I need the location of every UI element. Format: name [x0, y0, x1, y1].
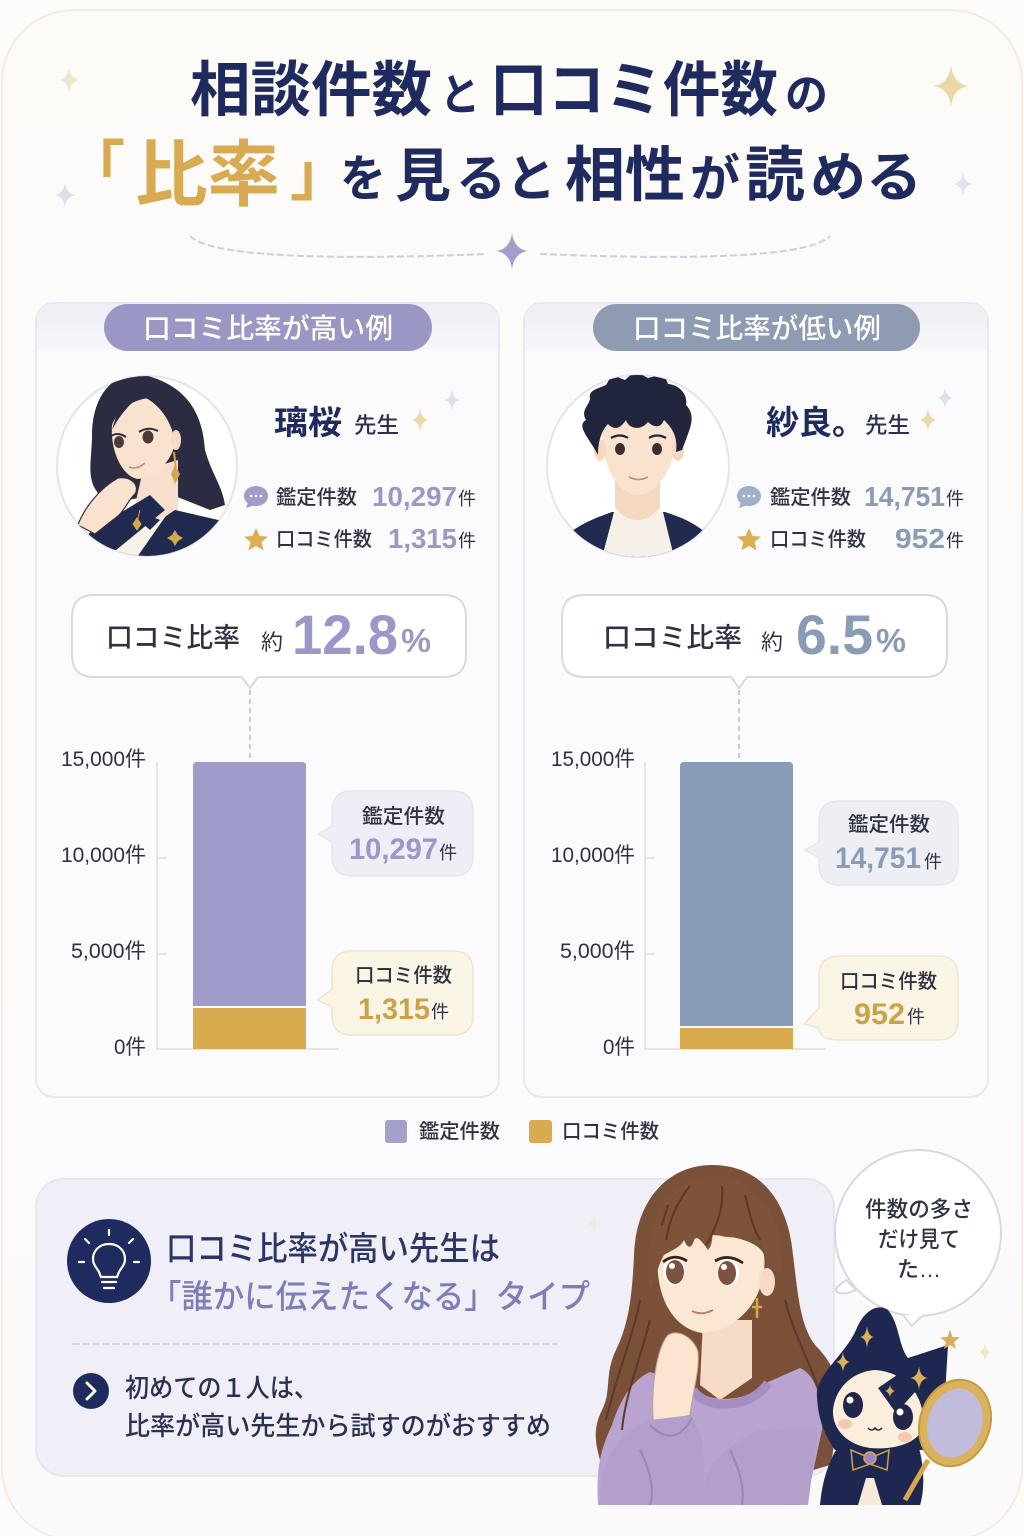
title [65, 57, 922, 216]
icon: chat bubble [244, 486, 268, 508]
callout: review value: 件 [431, 1002, 449, 1022]
panel: low ratio example [524, 303, 988, 1097]
stat: consultation count [737, 481, 964, 512]
title: める [810, 148, 922, 208]
title: 「 [65, 136, 125, 203]
title: を [340, 151, 386, 207]
teacher name: 先生 [354, 413, 399, 438]
teacher name: 璃桜 [274, 404, 342, 441]
legend [385, 1120, 659, 1143]
icon: chat bubble [737, 486, 761, 508]
stat: consultation count: 鑑定件数 [770, 486, 851, 509]
callout: review value: 952 [854, 998, 905, 1031]
callout: ratio 6.5%: 約 [761, 630, 783, 655]
panel heading pill [593, 304, 920, 351]
speech bubble [835, 1150, 1001, 1326]
bar: consultation segment [680, 762, 793, 1026]
speech bubble: だけ見て [878, 1227, 960, 1252]
bar: review segment [680, 1028, 793, 1049]
legend: 鑑定件数 [419, 1120, 500, 1143]
panel heading pill [104, 304, 432, 351]
teacher name [274, 389, 460, 441]
callout: ratio 6.5%: 口コミ比率 [603, 623, 742, 653]
callout: review value [804, 956, 958, 1040]
callout: consultation value: 14,751 [835, 842, 921, 875]
stat: review count: 口コミ件数 [770, 528, 866, 551]
title: 」 [290, 141, 350, 208]
title: 相談件数 [190, 57, 432, 124]
bar chart: high ratio: 0件 [114, 1036, 146, 1059]
callout: consultation value: 鑑定件数 [848, 813, 930, 836]
callout: ratio 12.8%: 12.8 [292, 603, 398, 666]
panel: high ratio example [36, 303, 499, 1097]
stat: consultation count: 14,751 [864, 481, 945, 512]
callout: ratio 12.8%: 口コミ比率 [106, 623, 240, 653]
illustration: woman with long brown hair [596, 1165, 836, 1505]
bar chart: low ratio: 5,000件 [560, 940, 635, 963]
title: 見 [395, 144, 451, 209]
teacher name: 紗良 [766, 404, 832, 441]
callout: ratio 12.8% [72, 595, 466, 688]
bar chart: low ratio: 15,000件 [551, 748, 635, 771]
teacher name [766, 387, 953, 441]
bar chart: low ratio: 10,000件 [551, 844, 635, 867]
bar chart: low ratio [551, 690, 958, 1059]
stat: review count: 1,315 [388, 523, 457, 554]
callout: review value: 件 [907, 1007, 925, 1027]
stat: consultation count: 鑑定件数 [276, 486, 357, 509]
bar chart: high ratio [61, 690, 473, 1059]
callout: review value [317, 951, 473, 1035]
callout: ratio 12.8%: 約 [261, 630, 283, 655]
speech bubble: 件数の多さ [865, 1197, 973, 1222]
callout: review value: 口コミ件数 [840, 970, 937, 993]
title: 比率 [135, 136, 280, 216]
callout: review value: 口コミ件数 [355, 964, 452, 987]
title: の [785, 71, 828, 120]
bar chart: high ratio: 15,000件 [61, 748, 146, 771]
stat: consultation count: 件 [458, 489, 476, 509]
stat: review count: 952 [895, 523, 945, 554]
stat: consultation count: 10,297 [372, 481, 457, 512]
bar: review segment [193, 1008, 306, 1049]
teacher name: 先生 [865, 413, 910, 438]
bar chart: high ratio: 5,000件 [71, 940, 146, 963]
tip row [73, 1373, 551, 1441]
icon: star [244, 528, 268, 550]
callout: consultation value: 件 [439, 843, 457, 863]
callout: ratio 6.5% [562, 595, 947, 688]
decorative title sparkles [54, 65, 973, 208]
icon: light bulb [67, 1219, 151, 1303]
callout: review value: 1,315 [358, 993, 430, 1026]
panel: takeaway [36, 1179, 834, 1476]
bar chart: low ratio: 0件 [603, 1036, 635, 1059]
avatar: female fortune teller [56, 375, 238, 557]
title divider with star [190, 233, 830, 269]
icon: chevron [73, 1373, 109, 1409]
stat: review count [737, 523, 964, 554]
panel heading pill: 口コミ比率が高い例 [143, 313, 393, 344]
callout: consultation value [805, 801, 958, 885]
sparkle on takeaway panel [588, 1216, 600, 1232]
avatar: male fortune teller [545, 371, 730, 565]
callout: consultation value: 件 [924, 852, 942, 872]
takeaway heading: 「誰かに伝えたくなる」タイプ [150, 1278, 590, 1315]
tip row: 比率が高い先生から試すのがおすすめ [125, 1411, 551, 1441]
takeaway heading: 口コミ比率が高い先生は [166, 1230, 500, 1267]
teacher name: 。 [832, 404, 865, 441]
stat: consultation count [244, 481, 476, 512]
legend: 口コミ件数 [562, 1120, 659, 1143]
takeaway heading [150, 1230, 590, 1315]
speech bubble: た… [897, 1257, 941, 1282]
callout: consultation value [318, 791, 473, 876]
title: が [690, 151, 740, 207]
stat: review count: 件 [946, 531, 964, 551]
stat: review count: 口コミ件数 [276, 528, 372, 551]
stat: review count: 件 [458, 531, 476, 551]
title: 読 [745, 142, 805, 209]
tip row: 初めての１人は、 [125, 1373, 318, 1403]
panel heading pill: 口コミ比率が低い例 [633, 313, 881, 344]
callout: ratio 6.5%: 6.5 [796, 603, 873, 666]
bar: consultation segment [193, 762, 306, 1006]
title: と [440, 71, 480, 120]
title: ると [456, 151, 556, 207]
illustration: mascot with mirror [817, 1307, 1002, 1505]
callout: consultation value: 鑑定件数 [362, 805, 445, 828]
callout: ratio 6.5%: % [876, 622, 906, 659]
callout: ratio 12.8%: % [401, 622, 431, 659]
icon: star [737, 528, 761, 550]
title: 相性 [565, 142, 685, 209]
stat: review count [244, 523, 476, 554]
stat: consultation count: 件 [946, 489, 964, 509]
callout: consultation value: 10,297 [349, 833, 438, 866]
bar chart: high ratio: 10,000件 [61, 844, 146, 867]
title: 口コミ件数 [490, 57, 778, 124]
